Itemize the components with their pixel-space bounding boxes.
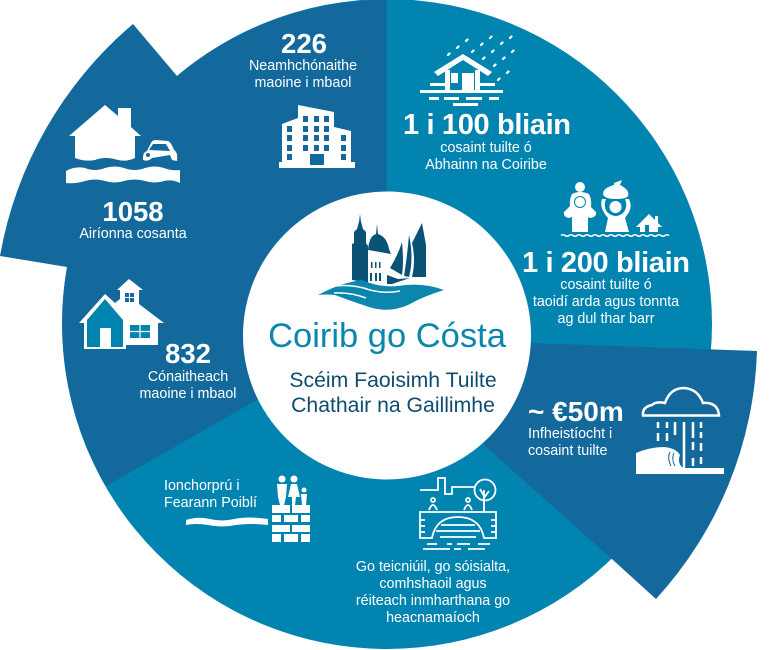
- text: 1058: 1058: [102, 196, 164, 227]
- text: 1 i 200 bliain: 1 i 200 bliain: [522, 247, 690, 279]
- text: 1 i 100 bliain: 1 i 100 bliain: [403, 109, 571, 141]
- text: Go teicniúil, go sóisialta: réiteach inmharthana go: [356, 593, 510, 609]
- text: Ionchorprú i Fearann Poiblí: Ionchorprú i: [164, 478, 240, 494]
- panel: dark right segment: [440, 343, 757, 599]
- text: cosaint tuilte ó taoidí arda agus tonnta ag dul thar barr: taoidí arda agus tonnta: [533, 294, 679, 310]
- text: cosaint tuilte ó taoidí arda agus tonnta ag dul thar barr: ag dul thar barr: [558, 311, 655, 327]
- text: Cónaitheach maoine i mbaol: maoine i mbaol: [140, 386, 236, 402]
- text: Cónaitheach maoine i mbaol: Cónaitheach: [148, 369, 228, 385]
- icon: house with roof window: [79, 279, 164, 349]
- text: Neamhchónaithe maoine i mbaol: Neamhchónaithe: [249, 58, 357, 74]
- text: Neamhchónaithe maoine i mbaol: maoine i mbaol: [255, 75, 351, 91]
- text: Infheistíocht i cosaint tuilte: cosaint tuilte: [528, 443, 608, 459]
- subtitle: Scéim Faoisimh Tuilte Chathair na Gaillimhe: Chathair na Gaillimhe: [291, 394, 495, 417]
- logo building windows: [365, 262, 381, 281]
- logo sails: [387, 223, 426, 284]
- text: Go teicniúil, go sóisialta: heacnamaíoch: [386, 610, 480, 626]
- text: Infheistíocht i cosaint tuilte: Infheistíocht i: [528, 426, 612, 442]
- panel: centre circle: [243, 192, 531, 480]
- text: Airíonna cosanta: Airíonna cosanta: [79, 226, 187, 242]
- text: Ionchorprú i Fearann Poiblí: Fearann Poiblí: [164, 495, 257, 511]
- icon: flooded house and car: [66, 105, 180, 183]
- text: 226: 226: [281, 28, 327, 59]
- icon: figures with flood and house: [561, 180, 669, 236]
- text: cosaint tuilte ó Abhainn na Coiribe: cosaint tuilte ó: [440, 140, 532, 156]
- panel: dark left segment: [0, 0, 387, 486]
- text: ~ €50m: ~ €50m: [528, 396, 624, 427]
- text: cosaint tuilte ó Abhainn na Coiribe: Abhainn na Coiribe: [425, 157, 547, 173]
- logo waves: [318, 280, 444, 310]
- icon: rain cloud and wave: [636, 388, 724, 474]
- icon: people on wall above water: [186, 476, 310, 542]
- logo tower: [352, 214, 368, 283]
- icon: bridge and cityscape: [420, 478, 496, 549]
- text: Go teicniúil, go sóisialta: comhshaoil agus: [379, 576, 487, 592]
- text: Go teicniúil, go sóisialta: Go teicniúil, go sóisialta,: [356, 559, 510, 575]
- text: cosaint tuilte ó taoidí arda agus tonnta ag dul thar barr: cosaint tuilte ó: [560, 277, 652, 293]
- logo: cathedral, sails and waves: [318, 214, 444, 310]
- icon: office buildings: [279, 105, 355, 168]
- logo dome: [368, 224, 391, 254]
- subtitle: Scéim Faoisimh Tuilte Chathair na Gaillimhe: Scéim Faoisimh Tuilte: [289, 369, 497, 392]
- title: Coirib go Cósta: Coirib go Cósta: [268, 317, 507, 355]
- icon: house in rain: [420, 36, 514, 106]
- text: 832: 832: [165, 338, 211, 369]
